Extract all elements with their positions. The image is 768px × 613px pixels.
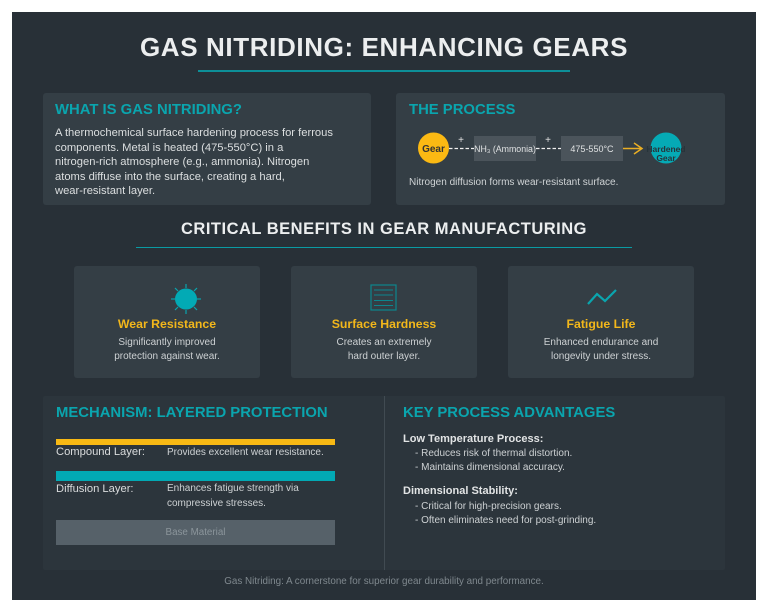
arrow	[623, 143, 642, 154]
heading: key process advantages: KEY PROCESS ADVANTAGES	[403, 405, 615, 421]
base material bar: Base Material	[166, 527, 225, 538]
node: ammonia	[474, 136, 536, 161]
node: hardened gear: Gear	[656, 153, 676, 163]
subheading: Low Temperature Process:	[403, 433, 543, 445]
card text: Creates an extremely	[336, 337, 432, 348]
plus sign 2: +	[545, 135, 551, 146]
description text: components. Metal is heated (475-550°C) in a	[55, 142, 283, 154]
card text	[336, 337, 432, 362]
heading: the process: THE PROCESS	[409, 102, 515, 118]
card text	[544, 337, 658, 362]
description text	[55, 127, 333, 197]
icon: sun-like wear icon	[171, 284, 201, 314]
bullet list: - Maintains dimensional accuracy.	[415, 462, 565, 472]
panel: what is gas nitriding	[43, 93, 371, 205]
compound layer bar	[56, 439, 335, 445]
node: gear: Gear	[422, 144, 445, 155]
compound layer label: Compound Layer:	[56, 446, 145, 458]
vertical divider	[384, 396, 385, 570]
dashed connector 1	[449, 148, 474, 150]
title: GAS NITRIDING: ENHANCING GEARS	[140, 32, 628, 62]
card title: Wear Resistance	[118, 317, 216, 331]
description text: wear-resistant layer.	[55, 185, 155, 197]
card text: longevity under stress.	[551, 351, 651, 362]
card text: hard outer layer.	[348, 351, 420, 362]
diffusion layer description	[167, 483, 299, 509]
advantage: dimensional stability	[403, 485, 596, 526]
process diagram	[418, 132, 686, 164]
card: wear resistance	[74, 266, 260, 378]
advantage: low temperature	[403, 433, 572, 472]
bullet list	[415, 501, 596, 526]
heading: mechanism: MECHANISM: LAYERED PROTECTION	[56, 405, 328, 421]
panel: mechanism and advantages	[43, 396, 725, 570]
card title: Surface Hardness	[332, 317, 436, 331]
bullet list	[415, 448, 572, 472]
card title: Fatigue Life	[566, 317, 636, 331]
icon: layered document	[370, 284, 397, 311]
compound layer description: Provides excellent wear resistance.	[167, 447, 324, 458]
card text: protection against wear.	[114, 351, 220, 362]
section heading: critical benefits: CRITICAL BENEFITS IN GEAR MANUFACTURING	[181, 220, 587, 238]
node: hardened gear: Hardened	[646, 144, 686, 154]
bullet list: - Reduces risk of thermal distortion.	[415, 448, 572, 459]
diffusion layer description: Enhances fatigue strength via	[167, 483, 299, 494]
base material bar	[56, 520, 335, 545]
icon: zigzag line	[587, 289, 617, 305]
dashed connector 2	[536, 148, 561, 150]
diffusion layer description: compressive stresses.	[167, 498, 266, 509]
bullet list: - Critical for high-precision gears.	[415, 501, 562, 512]
card text	[114, 337, 220, 362]
node: temperature	[561, 136, 623, 161]
description text: A thermochemical surface hardening process for ferrous	[55, 127, 333, 139]
section underline	[136, 247, 632, 248]
plus sign 1: +	[458, 135, 464, 146]
card: fatigue life	[508, 266, 694, 378]
diffusion layer label: Diffusion Layer:	[56, 483, 134, 495]
panel: the process	[396, 93, 725, 205]
subheading: Dimensional Stability:	[403, 485, 518, 497]
node: temperature: 475-550°C	[570, 144, 614, 154]
heading: what is gas nitriding: WHAT IS GAS NITRIDING?	[55, 102, 242, 118]
process caption: Nitrogen diffusion forms wear-resistant surface.	[409, 177, 618, 188]
description text: atoms diffuse into the surface, creating a hard,	[55, 171, 285, 183]
footer: Gas Nitriding: A cornerstone for superior gear durability and performance.	[224, 576, 544, 587]
bullet list: - Often eliminates need for post-grinding.	[415, 514, 596, 526]
node: ammonia: NH₃ (Ammonia)	[474, 144, 536, 154]
card text: Significantly improved	[118, 337, 216, 348]
description text: nitrogen-rich atmosphere (e.g., ammonia). Nitrogen	[55, 156, 309, 168]
diffusion layer bar	[56, 471, 335, 480]
card text: Enhanced endurance and	[544, 337, 658, 348]
node: hardened gear	[646, 132, 686, 164]
title underline	[198, 70, 570, 72]
node: gear	[418, 132, 449, 164]
card: surface hardness	[291, 266, 477, 378]
